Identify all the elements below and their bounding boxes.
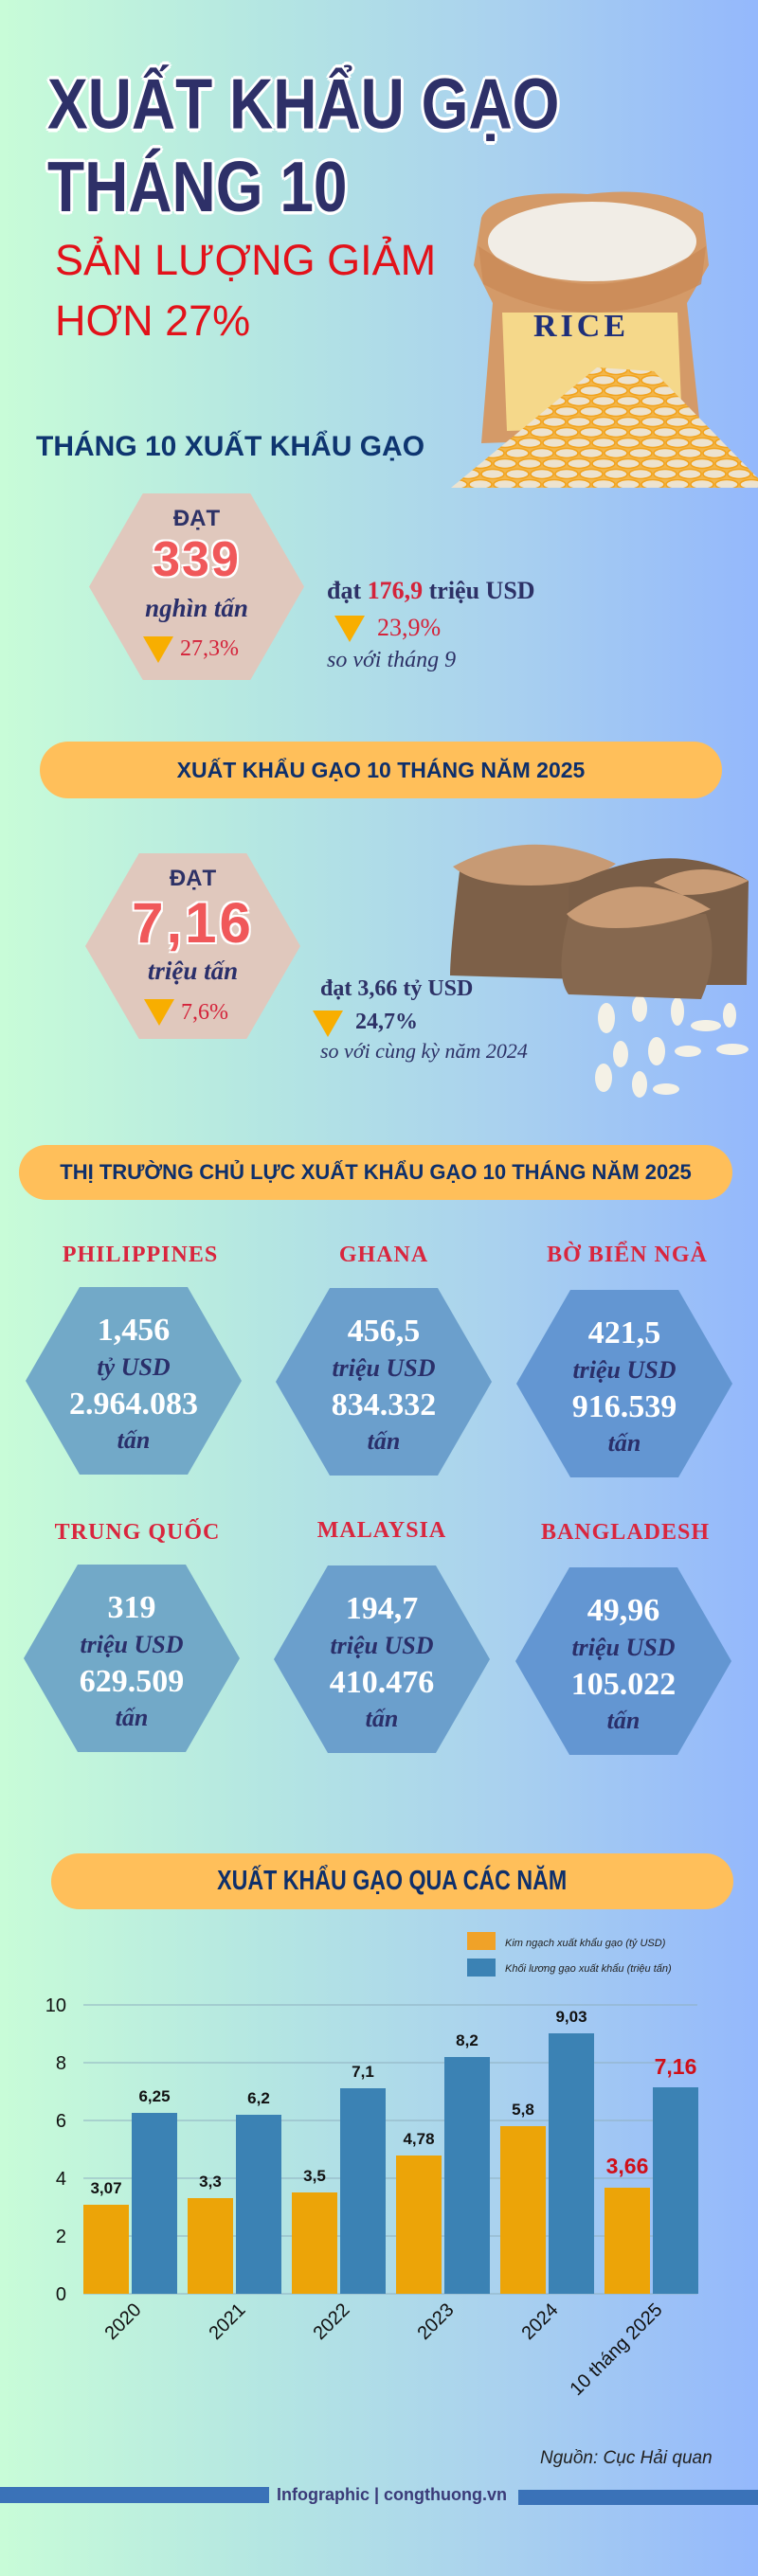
x labels: 10 tháng 2025 — [567, 2299, 667, 2400]
legend: Kim ngạch xuất khẩu gạo (tỷ USD) — [505, 1938, 666, 1949]
market: Bangladesh: triệu USD — [571, 1634, 676, 1661]
x labels: 2021 — [206, 2299, 250, 2344]
market: Trung Quốc: triệu USD — [80, 1631, 184, 1658]
hexagon: 339 nghìn tấn: 27,3% — [180, 636, 239, 661]
value labels: 9,03 — [555, 2008, 587, 2026]
hexagon: 339 nghìn tấn — [89, 493, 304, 680]
subtitle: HƠN 27% — [55, 296, 250, 345]
hexagon: 7,16 triệu tấn: ĐẠT — [170, 866, 216, 891]
text block: 3,66 tỷ USD — [313, 976, 528, 1063]
value labels: 8,2 — [456, 2031, 478, 2049]
title: XUẤT KHẨU GẠO — [47, 63, 559, 144]
value labels: 7,1 — [352, 2063, 374, 2081]
banner: qua các năm — [51, 1853, 733, 1909]
market: Trung Quốc: tấn — [116, 1704, 148, 1731]
market: Bangladesh: 105.022 — [571, 1667, 676, 1702]
bars — [83, 2126, 650, 2294]
hexagon: 7,16 triệu tấn — [85, 853, 300, 1039]
illustration: rice sacks — [450, 845, 749, 1098]
market: Bờ Biển Ngà: tấn — [608, 1429, 641, 1457]
y axis labels — [45, 1995, 66, 2305]
market: Malaysia: tấn — [366, 1705, 398, 1732]
heading: tháng 10: THÁNG 10 XUẤT KHẨU GẠO — [36, 431, 424, 462]
x labels — [101, 2299, 667, 2400]
market: Trung Quốc: 629.509 — [80, 1664, 184, 1699]
market: Philippines — [26, 1243, 242, 1475]
market: Trung Quốc — [24, 1518, 240, 1752]
text block: USD value month 10: so với tháng 9 — [327, 648, 456, 672]
banner: thị trường chủ lực — [19, 1145, 732, 1200]
x labels: 2023 — [414, 2299, 459, 2344]
value labels — [90, 2008, 696, 2197]
x labels: 2020 — [101, 2299, 146, 2344]
value labels: 3,5 — [303, 2167, 326, 2185]
y axis labels: 10 — [45, 1995, 66, 2016]
text block: USD value month 10: 23,9% — [377, 614, 441, 641]
market: Philippines: 1,456 — [98, 1313, 170, 1348]
market: Bangladesh — [515, 1520, 731, 1755]
bar chart — [45, 1932, 698, 2400]
text block: USD value month 10 — [327, 577, 535, 672]
x labels: 2024 — [518, 2299, 563, 2344]
market: Trung Quốc: 319 — [108, 1590, 155, 1625]
hexagon: 339 nghìn tấn: ĐẠT — [173, 506, 220, 531]
value labels: 7,16 — [655, 2054, 696, 2079]
text block: 3,66 tỷ USD: 24,7% — [355, 1010, 418, 1034]
text block: USD value month 10: đạt 176,9 triệu USD — [327, 577, 535, 604]
market: Philippines: tấn — [117, 1426, 150, 1454]
market: Ghana: triệu USD — [332, 1354, 436, 1382]
market: Bờ Biển Ngà: 421,5 — [588, 1315, 660, 1351]
title: THÁNG 10 — [47, 147, 347, 227]
value labels: 6,25 — [138, 2087, 171, 2105]
market: Bangladesh: 49,96 — [587, 1593, 659, 1628]
hexagon: 7,16 triệu tấn: 7,16 — [132, 891, 254, 955]
market: Ghana — [276, 1243, 492, 1476]
market: Malaysia: 410.476 — [330, 1665, 434, 1700]
market: Ghana: 834.332 — [332, 1387, 436, 1422]
hexagon: 7,16 triệu tấn: triệu tấn — [148, 957, 238, 985]
subtitle: SẢN LƯỢNG GIẢM — [55, 236, 436, 284]
market: Bangladesh: BANGLADESH — [541, 1520, 710, 1545]
market: Philippines: PHILIPPINES — [63, 1243, 218, 1267]
market: Bờ Biển Ngà: 916.539 — [572, 1389, 677, 1424]
source: Nguồn: Cục Hải quan — [540, 2448, 713, 2468]
market: Philippines: tỷ USD — [97, 1353, 171, 1381]
title — [45, 61, 560, 227]
illustration: rice sack: RICE — [533, 309, 629, 344]
y axis labels: 8 — [56, 2053, 66, 2074]
text block: 3,66 tỷ USD: so với cùng kỳ năm 2024 — [320, 1039, 528, 1063]
illustration: rice sack — [451, 191, 758, 488]
y axis labels: 2 — [56, 2227, 66, 2247]
hexagon: 339 nghìn tấn: 339 — [153, 532, 241, 587]
banner: 10 tháng 2025 — [40, 742, 722, 798]
hexagon: 7,16 triệu tấn: 7,6% — [181, 1000, 228, 1025]
market: Bờ Biển Ngà: triệu USD — [572, 1356, 677, 1384]
legend — [467, 1932, 672, 1977]
market: Malaysia: MALAYSIA — [317, 1518, 446, 1543]
value labels: 3,66 — [606, 2154, 648, 2178]
x labels: 2022 — [310, 2299, 354, 2344]
market: Malaysia — [274, 1518, 490, 1753]
value labels: 5,8 — [512, 2101, 534, 2119]
market: Malaysia: 194,7 — [346, 1591, 418, 1626]
value labels: 3,07 — [90, 2179, 122, 2197]
market: Trung Quốc: TRUNG QUỐC — [55, 1520, 220, 1545]
y axis labels: 4 — [56, 2169, 66, 2190]
banner: 10 tháng 2025: XUẤT KHẨU GẠO 10 THÁNG NĂM 2025 — [177, 758, 585, 782]
market: Ghana: tấn — [368, 1427, 400, 1455]
value labels: 3,3 — [199, 2173, 222, 2191]
text block: 3,66 tỷ USD: đạt 3,66 tỷ USD — [320, 976, 473, 1001]
market: Malaysia: triệu USD — [330, 1632, 434, 1659]
legend: Khối lương gạo xuất khẩu (triệu tấn) — [505, 1963, 672, 1975]
hexagon: 339 nghìn tấn: nghìn tấn — [145, 594, 248, 622]
market: Ghana: 456,5 — [348, 1314, 420, 1349]
value labels: 6,2 — [247, 2089, 270, 2107]
market: Bờ Biển Ngà — [516, 1241, 732, 1477]
subtitle — [55, 236, 436, 345]
banner: thị trường chủ lực: THỊ TRƯỜNG CHỦ LỰC XUẤT KHẨU GẠO 10 THÁNG NĂM 2025 — [60, 1160, 692, 1184]
y axis labels: 6 — [56, 2111, 66, 2132]
market: Philippines: 2.964.083 — [69, 1386, 198, 1422]
market: Bờ Biển Ngà: BỜ BIỂN NGÀ — [547, 1243, 708, 1267]
value labels: 4,78 — [403, 2130, 435, 2148]
footer — [0, 2485, 758, 2505]
market: Bangladesh: tấn — [607, 1707, 640, 1734]
footer: Infographic | congthuong.vn — [277, 2485, 507, 2504]
banner: qua các năm: XUẤT KHẨU GẠO QUA CÁC NĂM — [217, 1866, 568, 1896]
y axis labels: 0 — [56, 2284, 66, 2305]
market: Ghana: GHANA — [339, 1243, 428, 1267]
